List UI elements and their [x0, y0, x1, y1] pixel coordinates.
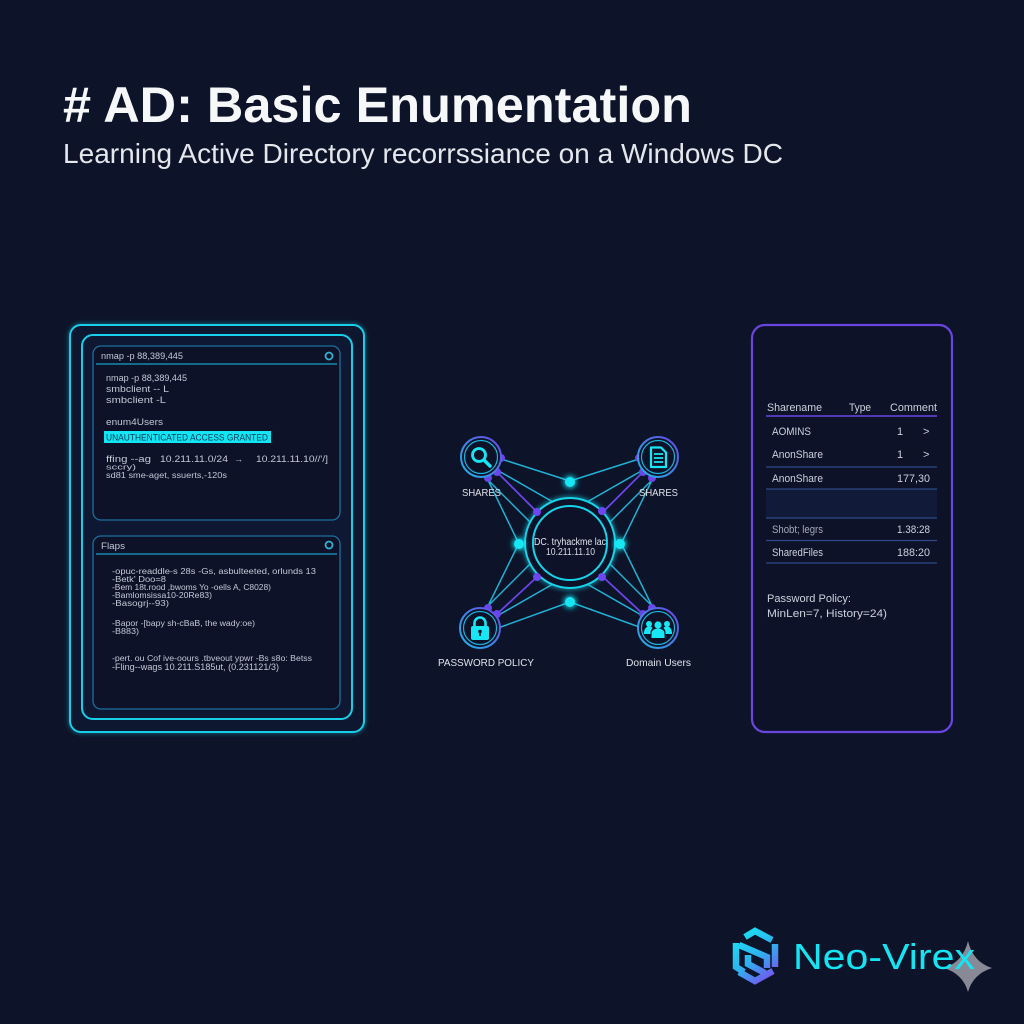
flag output: -Bem 18t.rood ,bwoms Yo -oells A, C8028)	[112, 583, 271, 592]
central domain controller node: 10.211.11.10	[546, 547, 595, 558]
junction dots	[513, 476, 626, 608]
command list: smbclient -- L	[106, 384, 169, 394]
links: top right	[570, 454, 656, 544]
table rows: 1.38:28	[897, 524, 930, 536]
password policy note: MinLen=7, History=24)	[767, 608, 887, 620]
icon: magnifier node	[461, 437, 501, 477]
inner frame	[82, 335, 352, 719]
label: shares right: SHARES	[639, 487, 678, 499]
label: domain users: Domain Users	[626, 657, 691, 669]
flag output: -Bamlomsissa10-20Re83)	[112, 591, 212, 600]
scan output: →	[234, 454, 243, 464]
command list: enum4Users	[106, 417, 164, 427]
panel: terminal device	[70, 325, 364, 732]
label: shares left: SHARES	[462, 487, 501, 499]
flag output: -Basogrj--93)	[112, 599, 169, 608]
table header	[766, 402, 937, 416]
table rows: 1	[897, 449, 903, 461]
table header: Sharename	[767, 402, 822, 414]
table rows: >	[923, 426, 929, 438]
links: bottom right	[570, 543, 656, 628]
flag output: -B883)	[112, 627, 139, 636]
terminal window: flags	[93, 536, 340, 709]
command list: nmap -p 88,389,445	[106, 373, 187, 383]
scan output	[106, 454, 328, 480]
icon: padlock node	[460, 608, 500, 648]
command list: smbclient -L	[106, 395, 166, 405]
window title: Flaps	[101, 541, 126, 551]
table header: Comment	[890, 402, 937, 414]
icon: users node	[638, 608, 678, 648]
panel frame	[752, 325, 952, 732]
scan output: ffing --ag	[106, 454, 151, 464]
subtitle: Learning Active Directory recorrssiance on a Windows DC	[63, 138, 783, 169]
table band	[766, 489, 937, 518]
command list	[106, 373, 187, 427]
flag output: -Fling--wags 10.211.S185ut, (0.231121/3)	[112, 662, 279, 672]
highlighted status: UNAUTHENTICATED ACCESS GRANTED	[106, 432, 268, 442]
table rows: 188:20	[897, 547, 930, 559]
table rows: SharedFiles	[772, 547, 823, 559]
scan output: sccry)	[106, 462, 137, 472]
node label: DC. tryhackme lac	[534, 537, 606, 548]
status icon	[326, 352, 332, 360]
central domain controller node	[525, 498, 615, 588]
scan output: sd81 sme-aget, ssuerts,-120s	[106, 471, 227, 480]
brand name: Neo-Virex	[793, 936, 975, 977]
flag output: -Betk' Doo=8	[112, 575, 167, 584]
icon: document node	[638, 437, 678, 477]
links: bottom left	[484, 543, 570, 628]
title: # AD: Basic Enumentation	[63, 77, 692, 133]
scan output: 10.211.11.10//'/]	[256, 454, 328, 464]
flag output: -pert. ou Cof ive-oours .tbveout ypwr -Bs s8o: Betss	[112, 654, 312, 663]
table rows	[766, 426, 937, 563]
flag output: -opuc-readdle-s 28s -Gs, asbulteeted, orlunds 13	[112, 567, 317, 576]
label: password policy: PASSWORD POLICY	[438, 657, 534, 669]
icon: hexagon logo	[736, 931, 775, 981]
table rows: 1	[897, 426, 903, 438]
links: top left	[484, 454, 570, 544]
table rows: Shobt; legrs	[772, 524, 823, 536]
network diagram	[438, 437, 691, 669]
password policy note: Password Policy:	[767, 593, 851, 605]
table rows: >	[923, 449, 929, 461]
window title: nmap -p 88,389,445	[101, 351, 183, 361]
scan output: 10.211.11.0/24	[160, 454, 228, 464]
flag output: -Bapor -[bapy sh-cBaB, the wady:oe)	[112, 619, 255, 628]
table rows: AnonShare	[772, 449, 823, 461]
terminal window: commands	[93, 346, 340, 520]
table rows: AnonShare	[772, 473, 823, 485]
flag output	[112, 567, 317, 672]
status icon	[326, 542, 332, 548]
panel: share listing	[752, 325, 952, 732]
table rows: 177,30	[897, 473, 930, 485]
outer frame	[70, 325, 364, 732]
table rows: AOMINS	[772, 426, 811, 438]
table header: Type	[849, 402, 871, 414]
sparkle watermark	[944, 941, 992, 992]
password policy note	[767, 593, 887, 620]
brand logo	[736, 931, 975, 981]
